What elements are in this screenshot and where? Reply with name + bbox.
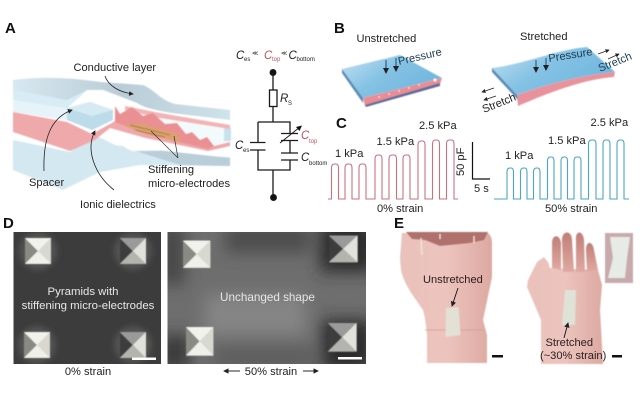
top pink strip [125,106,230,129]
arrow: spacer [44,110,72,171]
pressure labels left [335,120,457,160]
pressure labels left: 2.5 kPa [419,120,457,132]
panel label A: A [5,20,16,37]
label: Unstretched: Unstretched [356,33,416,45]
label: 0% strain: 0% strain [65,366,111,378]
scale bar [492,355,503,358]
spacer block [67,102,113,130]
trace: 0% strain [328,140,458,199]
text: Pyramids with stiffening micro-electrodes: stiffening micro-electrodes [22,300,155,312]
panel label B: B [334,20,345,37]
pressure labels left: 1.5 kPa [376,136,415,148]
formula [236,50,315,63]
panel: E wrist photos [394,215,633,364]
arrow [452,288,458,306]
label: 50% strain with arrows: 50% strain [245,366,297,378]
micro-electrodes [123,124,182,142]
text: Unchanged shape: Unchanged shape [220,291,315,304]
scale bar [612,355,622,358]
inner chamber [140,113,230,146]
label: Stiffening micro-electrodes [148,164,230,190]
sensor patch [562,290,576,325]
panel: C capacitance traces [328,115,629,215]
label: 50 pF: 50 pF [455,147,467,176]
pressure labels right: 2.5 kPa [590,117,629,129]
label: Stretched (~30% strain): (~30% strain) [540,350,606,362]
label: Stretched (~30% strain): Stretched [546,337,593,349]
arrow [564,323,568,338]
circuit labels: C [301,130,310,142]
circuit labels: S [288,101,292,107]
circuit labels: R [280,93,288,105]
circuit labels: C [301,152,310,164]
trace: 50% strain [494,140,629,199]
top conductive layer [13,78,230,120]
formula: top [272,57,281,63]
text: Pyramids with stiffening micro-electrodes: Pyramids with [48,286,118,298]
panel label D: D [3,215,14,232]
label: Stretch (left): Stretch [481,91,518,116]
inset: unstretched patch [605,233,633,283]
arrows: stiffening micro-electrodes [151,131,178,158]
label: Conductive layer: Conductive layer [74,62,156,74]
circuit labels [235,93,327,167]
panel: B stretched and unstretched sheets [334,20,634,116]
label: 50% strain: 50% strain [545,203,597,215]
pyramids [115,106,214,149]
pressure labels right [505,117,629,162]
label: 0% strain: 0% strain [377,203,423,215]
label: Stiffening micro-electrodes: Stiffening [148,164,194,176]
formula: C [264,50,273,62]
text: Pyramids with stiffening micro-electrodes [22,286,155,312]
bottom blue layer [13,135,230,190]
label: Pressure (stretched): Pressure [548,46,593,65]
label: Spacer: Spacer [29,177,64,189]
panel label C: C [336,115,347,132]
formula: C [288,50,298,62]
circuit labels: es [243,148,249,154]
circuit labels: bottom [309,161,327,167]
pressure labels left: 1 kPa [335,148,364,160]
formula: ≪ [252,51,258,57]
label: Pressure (unstretched): Pressure [397,46,443,68]
equivalent circuit [250,70,302,200]
label: Unstretched: Unstretched [423,274,483,286]
circuit labels: top [309,139,318,145]
label: Ionic dielectrics: Ionic dielectrics [80,199,156,211]
arrow: conductive layer [105,76,133,94]
scale bar [472,142,490,179]
panel label E: E [394,215,404,232]
label: Stretch (right): Stretch [597,50,634,75]
arrow: ionic dielectrics [91,131,114,190]
circuit labels: C [235,140,244,152]
unstretched sheet [342,55,442,107]
image: 50% strain [168,232,366,364]
label: 50% strain with arrows [224,366,318,378]
formula: es [244,57,250,63]
label: Stretched: Stretched [520,31,567,43]
photo: unstretched wrist [400,232,503,363]
red dielectric layer [13,112,230,151]
pressure labels right: 1 kPa [505,150,534,162]
label: Stiffening micro-electrodes: micro-electrodes [148,178,230,190]
panel: D microscope images [3,215,375,378]
photo: stretched wrist [527,232,633,364]
device illustration [13,78,231,190]
formula: C [236,50,245,62]
sensor patch [446,307,460,337]
pressure labels right: 1.5 kPa [548,135,586,147]
formula: ≪ [281,51,287,57]
stretch arrows [482,50,619,100]
image: 0% strain [14,232,161,364]
label: 5 s: 5 s [474,183,489,195]
label: Stretched (~30% strain) [540,337,606,362]
panel: A device schematic and circuit [5,20,327,211]
stretched sheet [492,47,615,106]
formula: bottom [296,57,315,63]
pressure arrows [386,58,546,73]
